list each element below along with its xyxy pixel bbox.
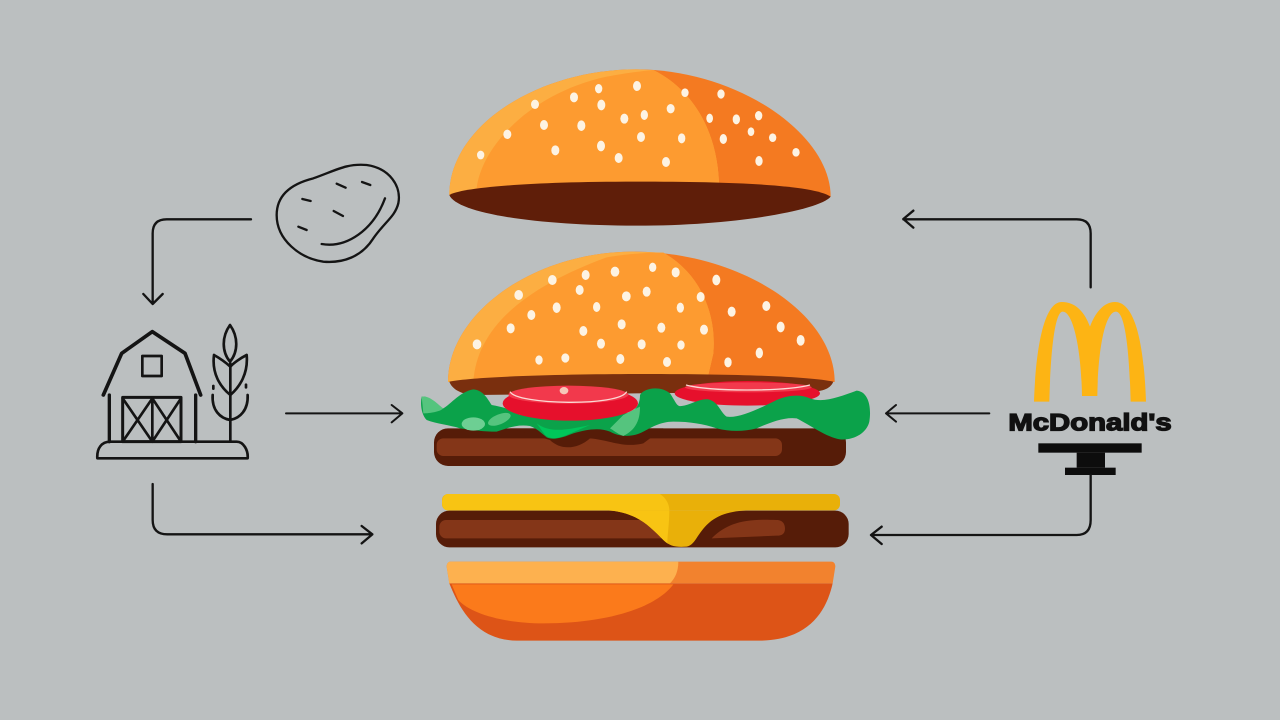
middle bun underside bbox=[449, 374, 833, 395]
sesame seeds bbox=[477, 81, 800, 167]
lettuce bbox=[421, 388, 870, 439]
icon: golden arches bbox=[1034, 302, 1146, 402]
arrow: logo to lettuce bbox=[886, 405, 989, 422]
arrow: logo to top bun bbox=[903, 211, 1091, 287]
bottom bun bbox=[447, 562, 835, 641]
logo pedestal bbox=[1038, 443, 1142, 475]
arrow: farm to patty bbox=[153, 484, 372, 543]
arrow: logo to patty bbox=[871, 475, 1091, 544]
arrow: potato to farm bbox=[143, 219, 251, 304]
icon: potato bbox=[277, 165, 399, 262]
patty one bbox=[434, 428, 846, 466]
middle bun bbox=[448, 252, 835, 382]
melted cheese drip bbox=[607, 510, 753, 547]
middle bun seeds bbox=[473, 263, 805, 367]
bun underside bbox=[449, 182, 831, 226]
middle bun dome bbox=[448, 252, 835, 382]
bun dome bbox=[449, 69, 831, 197]
logo wordmark: McDonald's bbox=[1008, 410, 1172, 437]
top bun bbox=[449, 69, 831, 226]
right side logo and arrows bbox=[871, 211, 1172, 544]
patty two bbox=[436, 511, 849, 547]
icon: barn and wheat bbox=[97, 325, 248, 458]
tomato slice left bbox=[503, 386, 638, 421]
cheese slice bbox=[442, 494, 840, 510]
arrow: farm to burger bbox=[286, 405, 402, 422]
burger fillings and lower layers bbox=[421, 374, 870, 641]
tomato slice right bbox=[675, 381, 820, 406]
left side icons and arrows bbox=[97, 165, 402, 543]
